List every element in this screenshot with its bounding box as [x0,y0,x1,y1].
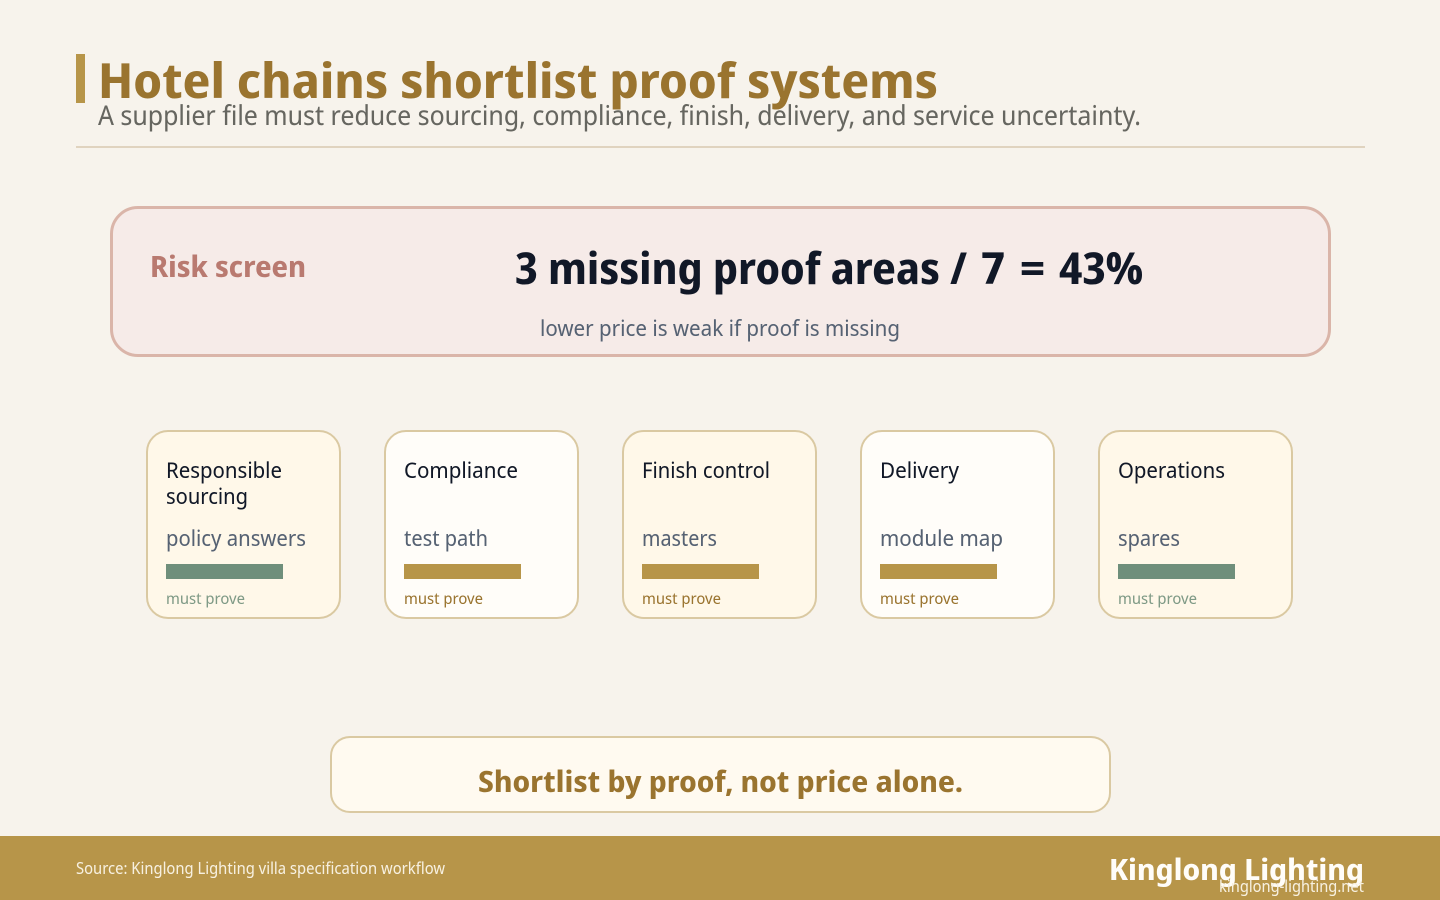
header accent bar [76,54,85,103]
card detail: spares [1118,523,1180,553]
card: delivery [861,431,1054,618]
proof bar [1118,564,1235,579]
risk equation: 3 missing proof areas / [515,237,967,297]
proof bar [404,564,521,579]
risk equation: 43% [1059,237,1143,297]
card caption: must prove [166,589,245,609]
card detail: policy answers [166,523,306,553]
card title: Delivery [880,455,959,485]
card caption: must prove [880,589,959,609]
card caption: must prove [1118,589,1197,609]
card: finish control [623,431,816,618]
card title: Responsible [166,455,282,485]
card title: Operations [1118,455,1225,485]
brand name: Kinglong Lighting [1109,848,1364,889]
proof bar [166,564,283,579]
panel: risk screen [112,208,1330,356]
proof bar [880,564,997,579]
card caption: must prove [404,589,483,609]
card title: Compliance [404,455,518,485]
card caption: must prove [642,589,721,609]
callout: conclusion [331,737,1110,812]
risk note: lower price is weak if proof is missing [540,313,900,343]
card title: Finish control [642,455,770,485]
card: operations [1099,431,1292,618]
footer band [0,836,1440,900]
subtitle: A supplier file must reduce sourcing, compliance, finish, delivery, and service uncertainty. [98,96,1141,133]
title: Hotel chains shortlist proof systems [98,48,938,113]
conclusion text: Shortlist by proof, not price alone. [478,760,963,801]
card: responsible sourcing [147,431,340,618]
source note: Source: Kinglong Lighting villa specification workflow [76,857,445,879]
card detail: module map [880,523,1003,553]
card detail: test path [404,523,488,553]
risk equation: = [1020,237,1045,297]
card detail: masters [642,523,717,553]
risk equation: 7 [981,237,1005,297]
card title second line: sourcing [166,481,248,511]
card: compliance [385,431,578,618]
proof bar [642,564,759,579]
risk screen label: Risk screen [150,245,306,286]
brand url: kinglong-lighting.net [1219,875,1364,897]
